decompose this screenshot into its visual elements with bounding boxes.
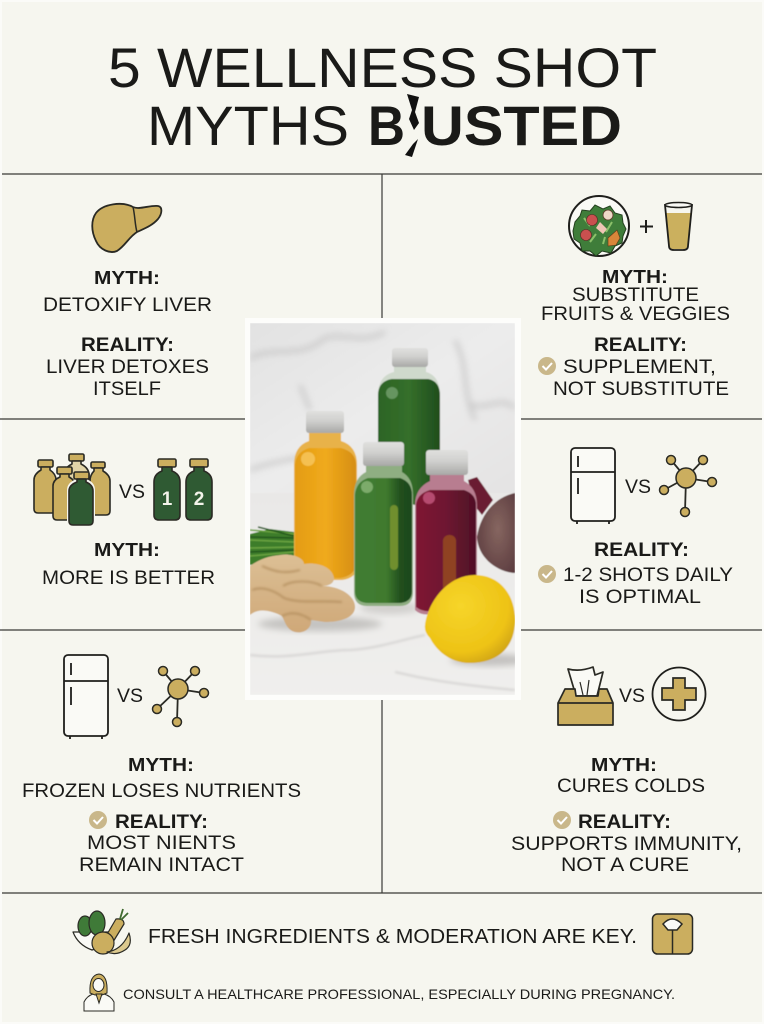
- panel: detoxify liver: DETOXIFY LIVER: [43, 295, 212, 316]
- label: vs: VS: [625, 477, 651, 498]
- title: B: [368, 94, 405, 157]
- icon: tissue box: [558, 667, 613, 725]
- icon: vegetables: [73, 909, 130, 954]
- icon: glass of juice: [665, 202, 692, 250]
- panel: detoxify liver: LIVER DETOXES: [46, 357, 209, 378]
- icon: check badge: [538, 357, 556, 375]
- panel: detoxify liver: MYTH:: [94, 268, 160, 288]
- shadows: [258, 617, 382, 631]
- icon: molecule: [152, 666, 208, 726]
- beet bottle: [415, 450, 477, 615]
- panel: cures colds: [511, 667, 742, 876]
- tall green bottle: [378, 348, 440, 506]
- icon: molecule: [660, 456, 716, 516]
- title: USTED: [421, 94, 622, 157]
- panel: cures colds: CURES COLDS: [557, 776, 705, 797]
- icon: two green bottles: 2: [194, 489, 204, 510]
- panel: substitute fruits and veggies: FRUITS & VEGGIES: [541, 304, 730, 325]
- footer: consult professional: CONSULT A HEALTHCARE PROFESSIONAL, ESPECIALLY DURING PREGNANCY.: [123, 986, 675, 1002]
- panel: detoxify liver: REALITY:: [81, 335, 174, 356]
- label: vs: VS: [117, 686, 143, 707]
- icon: fridge: [571, 448, 615, 524]
- icon: plus: [640, 220, 653, 233]
- icon: check badge: [553, 811, 571, 829]
- mid green bottle: [354, 442, 413, 606]
- footer: consult professional: [84, 974, 675, 1011]
- panel: cures colds: NOT A CURE: [561, 855, 689, 876]
- lemon: [425, 575, 515, 663]
- panel: shots daily: 1-2 SHOTS DAILY: [563, 565, 733, 586]
- panel: shots daily: IS OPTIMAL: [579, 587, 701, 608]
- title: MYTHS: [147, 94, 349, 157]
- title: 5 WELLNESS SHOT: [108, 36, 657, 99]
- icon: doctor: [84, 974, 114, 1011]
- icon: salad bowl: [569, 196, 629, 256]
- panel: substitute fruits and veggies: [538, 196, 730, 400]
- footer: fresh ingredients: FRESH INGREDIENTS & MODERATION ARE KEY.: [148, 925, 637, 948]
- icon: bathroom scale: [652, 914, 692, 954]
- panel: substitute fruits and veggies: SUBSTITUTE: [572, 285, 699, 306]
- photo: juice shots: [245, 318, 530, 700]
- panel: substitute fruits and veggies: SUPPLEMENT,: [563, 357, 716, 378]
- panel: more is better: MORE IS BETTER: [42, 568, 215, 589]
- icon: fridge: [64, 655, 108, 739]
- grass: [250, 527, 294, 565]
- title: [108, 36, 657, 157]
- icon: many gold bottles: [34, 454, 110, 525]
- panel: cures colds: SUPPORTS IMMUNITY,: [511, 834, 742, 855]
- panel: frozen loses nutrients: MOST NIENTS: [87, 833, 236, 854]
- icon: liver: [92, 204, 161, 252]
- panel: substitute fruits and veggies: MYTH:: [602, 267, 668, 287]
- marble wall: [250, 323, 515, 495]
- icon: medical cross: [652, 668, 706, 720]
- footer: fresh ingredients: [73, 909, 692, 954]
- panel: frozen loses nutrients: MYTH:: [128, 755, 194, 775]
- panel: shots daily: [538, 448, 733, 608]
- grid lines: [0, 174, 762, 893]
- panel: cures colds: REALITY:: [578, 812, 671, 833]
- icon: check badge: [89, 811, 107, 829]
- ginger: [250, 555, 355, 632]
- marble table: [250, 493, 515, 695]
- panel: more is better: [34, 454, 215, 589]
- label: vs: VS: [619, 686, 645, 707]
- panel: frozen loses nutrients: REALITY:: [115, 812, 208, 833]
- panel: detoxify liver: ITSELF: [93, 379, 161, 400]
- panel: detoxify liver: [43, 204, 212, 400]
- panel: more is better: MYTH:: [94, 540, 160, 560]
- icon: check badge: [538, 565, 556, 583]
- panel: cures colds: MYTH:: [591, 755, 657, 775]
- beet leaves: [468, 477, 493, 515]
- icon: two green bottles: 1: [162, 489, 173, 510]
- panel: frozen loses nutrients: REMAIN INTACT: [79, 855, 244, 876]
- panel: substitute fruits and veggies: REALITY:: [594, 335, 687, 356]
- panel: shots daily: REALITY:: [594, 540, 689, 561]
- beet root: [477, 493, 515, 573]
- panel: frozen loses nutrients: FROZEN LOSES NUTRIENTS: [22, 781, 301, 802]
- label: vs: VS: [119, 482, 145, 503]
- panel: frozen loses nutrients: [22, 655, 301, 876]
- panel: substitute fruits and veggies: NOT SUBSTITUTE: [553, 379, 729, 400]
- icon: two green bottles: [154, 459, 212, 520]
- orange bottle: [294, 411, 357, 580]
